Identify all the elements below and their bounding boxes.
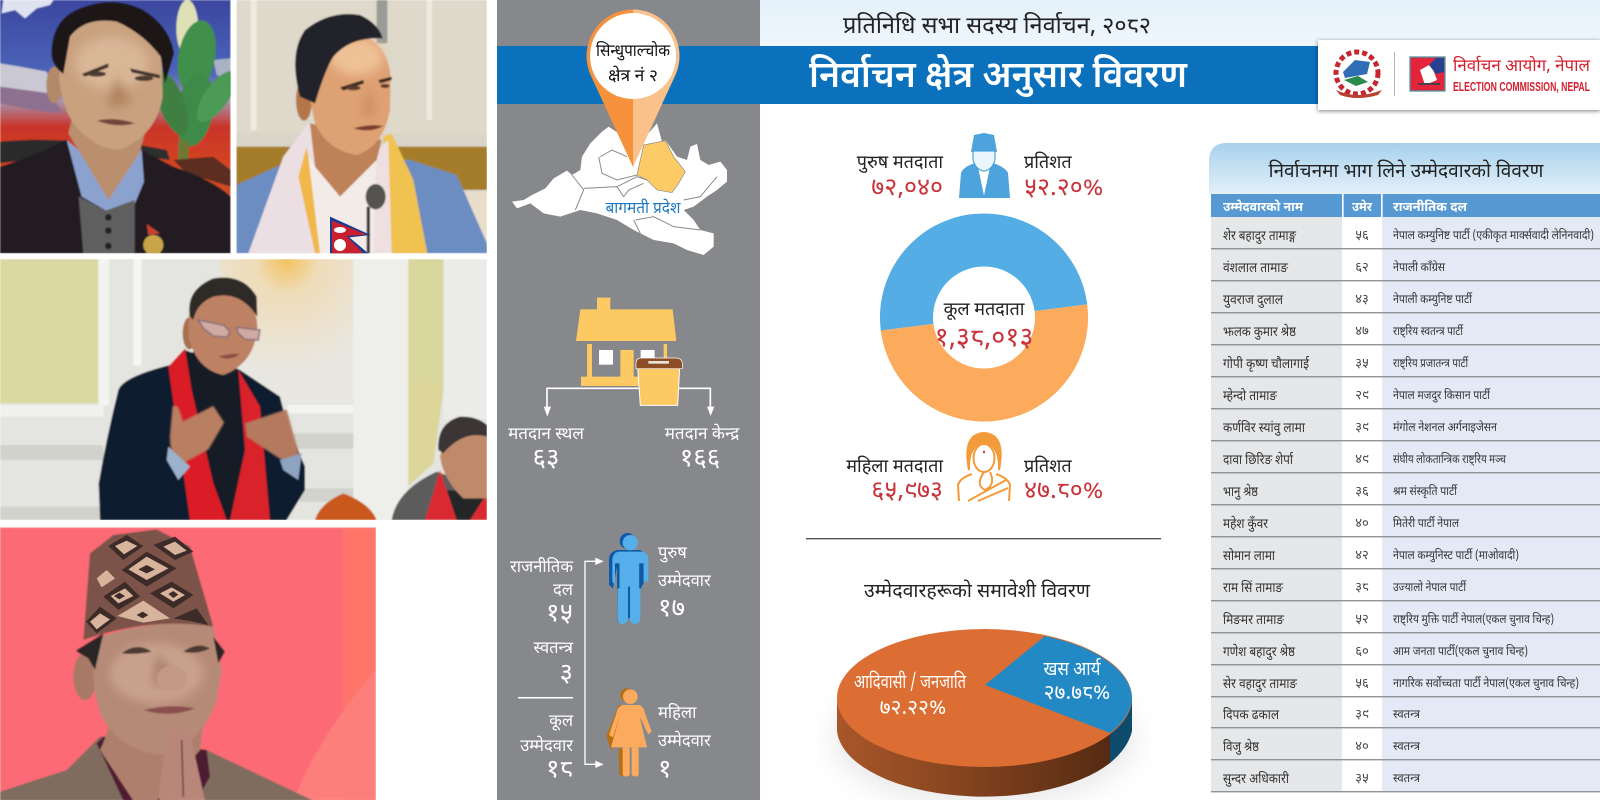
candidate row 14: गणेश बहादुर श्रेष्ठ — [1223, 642, 1296, 662]
candidate row 4: ४७ — [1355, 324, 1369, 341]
candidate row 18: ३५ — [1355, 771, 1369, 788]
male voters — [857, 152, 1103, 206]
pin text: क्षेत्र नं २ — [608, 64, 658, 88]
candidate row 3: ४३ — [1355, 292, 1369, 309]
candidate totals: दल — [553, 580, 574, 602]
candidate totals: ३ — [559, 658, 573, 692]
candidate row 14 — [1223, 642, 1528, 662]
candidate row 5: गोपी कृष्ण चौलागाई — [1223, 355, 1310, 374]
candidate row 8: संघीय लोकतान्त्रिक राष्ट्रिय मञ्च — [1393, 451, 1506, 468]
candidate row 5: ३५ — [1355, 356, 1369, 373]
candidates labels: female — [658, 703, 711, 788]
candidate row 10 — [1223, 514, 1460, 534]
candidate row 5: राष्ट्रिय प्रजातन्त्र पार्टी — [1393, 355, 1469, 372]
polling centres: मतदान केन्द्र — [665, 422, 740, 446]
candidate row 2: ६२ — [1355, 260, 1369, 277]
table row lines — [1211, 248, 1600, 792]
candidate row 6: नेपाल मजदुर किसान पार्टी — [1393, 387, 1491, 404]
candidate row 3: युवराज दुलाल — [1223, 292, 1284, 310]
icon: male candidate — [609, 533, 648, 624]
candidate row 3 — [1223, 291, 1473, 310]
candidate totals: राजनीतिक — [510, 557, 573, 579]
table header row — [1211, 194, 1600, 217]
candidate row 17: विजु श्रेष्ठ — [1223, 737, 1260, 757]
panel: grey constituency panel — [497, 0, 760, 800]
candidates labels: male: १७ — [658, 593, 685, 627]
candidate totals: कूल — [549, 711, 574, 733]
donut centre label — [935, 300, 1033, 358]
candidate row 9: भानु श्रेष्ठ — [1223, 482, 1259, 502]
pie label: khas arya: खस आर्य — [1044, 657, 1101, 683]
candidate row 2: नेपाली कॉंग्रेस — [1393, 259, 1446, 276]
candidate row 18: सुन्दर अधिकारी — [1223, 770, 1289, 789]
Election Commission icon — [1410, 57, 1445, 91]
candidate row 9: ३६ — [1355, 484, 1369, 501]
candidate row 4: राष्ट्रिय स्वतन्त्र पार्टी — [1393, 323, 1464, 340]
candidate row 6 — [1223, 386, 1491, 406]
candidate row 1: शेर बहादुर तामाङ्ग — [1223, 226, 1296, 246]
candidate row 8: दावा छिरिङ शेर्पा — [1223, 450, 1294, 470]
candidate row 6: म्हेन्दो तामाङ — [1223, 386, 1277, 406]
candidate row 9 — [1223, 482, 1458, 502]
candidate row 16: दिपक ढकाल — [1223, 706, 1280, 725]
candidate row 2 — [1223, 259, 1446, 278]
candidate row 17: स्वतन्त्र — [1393, 739, 1420, 755]
donut centre label: १,३८,०१३ — [935, 323, 1033, 358]
candidate row 15: नागरिक सर्वोच्चता पार्टी नेपाल(एकल चुनाव चिन्ह) — [1393, 675, 1579, 692]
candidate row 16: स्वतन्त्र — [1393, 707, 1420, 723]
pie label: khas arya: २७.७८% — [1044, 680, 1110, 708]
header band — [497, 46, 1318, 104]
candidate row 13: राष्ट्रिय मुक्ति पार्टी नेपाल(एकल चुनाव चिन्ह) — [1393, 611, 1554, 628]
candidate row 11: नेपाल कम्युनिस्ट पार्टी (माओवादी) — [1393, 547, 1519, 564]
candidate totals: १८ — [546, 754, 573, 788]
pie chart: inclusion breakdown — [834, 629, 1134, 800]
candidate row 11 — [1223, 547, 1519, 566]
pie label: khas arya — [1044, 657, 1110, 708]
donut chart: voters — [880, 213, 1088, 422]
candidate row 15: सेर वहादुर तामाङ — [1223, 674, 1297, 694]
candidate row 7: मंगोल नेशनल अर्गनाइजेसन — [1393, 419, 1497, 436]
candidate row 18 — [1223, 770, 1420, 789]
candidates labels: male: उम्मेदवार — [658, 571, 711, 593]
candidate row 11: सोमान लामा — [1223, 547, 1275, 566]
candidate row 10: मितेरी पार्टी नेपाल — [1393, 515, 1460, 532]
candidate row 7 — [1223, 419, 1497, 438]
female voters: महिला मतदाता — [846, 456, 943, 480]
donut centre label: कूल मतदाता — [944, 300, 1025, 323]
candidate row 3: नेपाली कम्युनिष्ट पार्टी — [1393, 291, 1473, 308]
candidates labels: male — [658, 543, 711, 627]
candidate row 18: स्वतन्त्र — [1393, 771, 1420, 787]
candidate row 2: वंशलाल तामाङ — [1223, 259, 1288, 278]
candidate totals: १५ — [546, 598, 573, 632]
male voters: ७२,०४० — [871, 174, 943, 206]
polling stations: मतदान स्थल — [508, 424, 584, 446]
candidate row 13: मिङमर तामाङ — [1223, 611, 1284, 630]
pie label: indigenous — [854, 671, 967, 723]
subtitle: प्रतिनिधि सभा सदस्य निर्वाचन, २०८२ — [843, 11, 1151, 43]
icon: female candidate — [606, 688, 652, 777]
candidate row 12: उज्यालो नेपाल पार्टी — [1393, 579, 1467, 596]
table header row: उम्मेदवारको नाम — [1223, 199, 1304, 217]
candidate row 4: झलक कुमार श्रेष्ठ — [1223, 322, 1297, 342]
divider — [806, 538, 1161, 539]
candidate row 17 — [1223, 737, 1420, 757]
pie label: indigenous: ७२.२२% — [880, 695, 946, 723]
candidate row 16 — [1223, 706, 1420, 725]
female voters: ६५,९७३ — [871, 477, 943, 509]
candidates labels: female: उम्मेदवार — [658, 731, 711, 753]
candidates labels: female: १ — [658, 754, 672, 788]
pie label: indigenous: आदिवासी / जनजाति — [854, 671, 967, 696]
photo: candidate in black suit — [0, 0, 244, 255]
candidate row 10: महेश कुँवर — [1223, 514, 1268, 534]
candidates labels: male: पुरुष — [658, 543, 687, 565]
label: province name: बागमती प्रदेश — [606, 198, 682, 220]
candidate row 14: ६० — [1355, 644, 1369, 661]
male voters: पुरुष मतदाता — [857, 153, 943, 176]
table heading: निर्वाचनमा भाग लिने उम्मेदवारको विवरण — [1269, 159, 1544, 185]
candidate totals: स्वतन्त्र — [534, 638, 574, 660]
icon: man with topi — [959, 133, 1010, 198]
photo: candidate with yellow scarf — [236, 0, 487, 253]
candidate row 15 — [1223, 674, 1579, 694]
candidate totals — [510, 557, 574, 788]
map pin — [587, 10, 679, 167]
candidate row 13: ५२ — [1355, 612, 1369, 629]
candidate row 1 — [1223, 226, 1594, 246]
candidate row 5 — [1223, 355, 1469, 374]
candidate row 10: ४० — [1355, 516, 1369, 533]
table header row: राजनीतिक दल — [1393, 199, 1467, 217]
pin text: सिन्धुपाल्चोक — [596, 40, 671, 63]
male voters: प्रतिशत — [1024, 152, 1072, 176]
male voters: ५२.२०% — [1024, 174, 1103, 206]
emblem — [1336, 52, 1382, 98]
arrows: candidates by gender — [585, 558, 604, 768]
candidate row 9: श्रम संस्कृति पार्टी — [1393, 483, 1458, 500]
candidate row 17: ४० — [1355, 739, 1369, 756]
candidate row 8 — [1223, 450, 1506, 470]
polling centres — [665, 422, 740, 477]
icon: woman in sari — [958, 433, 1010, 501]
table header row: उमेर — [1352, 199, 1372, 217]
candidate rows — [1223, 226, 1594, 789]
candidate row 4 — [1223, 322, 1464, 342]
candidate row 13 — [1223, 611, 1554, 630]
candidate row 7: ३९ — [1355, 420, 1369, 437]
table columns — [1211, 217, 1600, 792]
polling stations — [508, 424, 584, 477]
candidate row 1: ५६ — [1355, 228, 1369, 245]
photo: candidate with red scarf speaking — [0, 259, 487, 520]
polling centres: १६६ — [680, 443, 720, 477]
candidate row 12 — [1223, 579, 1467, 598]
title: निर्वाचन क्षेत्र अनुसार विवरण — [809, 53, 1188, 103]
female voters: ४७.८०% — [1024, 477, 1103, 509]
candidate row 16: ३९ — [1355, 707, 1369, 724]
logo panel: निर्वाचन आयोग, नेपाल — [1453, 54, 1590, 78]
candidate row 12: ३८ — [1355, 580, 1369, 597]
candidate row 15: ५६ — [1355, 676, 1369, 693]
panel: candidate table — [1209, 143, 1600, 792]
candidates labels: female: महिला — [658, 703, 697, 725]
map: Bagmati province — [512, 123, 727, 255]
background: top band — [760, 0, 1600, 46]
icon: polling house with ballot box — [544, 298, 714, 417]
candidate row 11: ४२ — [1355, 548, 1369, 565]
candidate row 6: २९ — [1355, 388, 1369, 405]
female voters: प्रतिशत — [1024, 456, 1072, 480]
logo panel — [1318, 40, 1600, 110]
candidate row 8: ४९ — [1355, 452, 1369, 469]
candidate row 7: कर्णविर स्यांवु लामा — [1223, 419, 1305, 438]
heading: inclusion: उम्मेदवारहरूको समावेशी विवरण — [864, 579, 1091, 605]
candidate totals: उम्मेदवार — [520, 736, 573, 758]
female voters — [846, 456, 1103, 509]
candidate row 12: राम सिं तामाङ — [1223, 579, 1283, 598]
candidate row 14: आम जनता पार्टी(एकल चुनाव चिन्ह) — [1393, 643, 1528, 660]
photo: candidate in patterned cap — [0, 527, 376, 800]
polling stations: ६३ — [532, 443, 560, 477]
